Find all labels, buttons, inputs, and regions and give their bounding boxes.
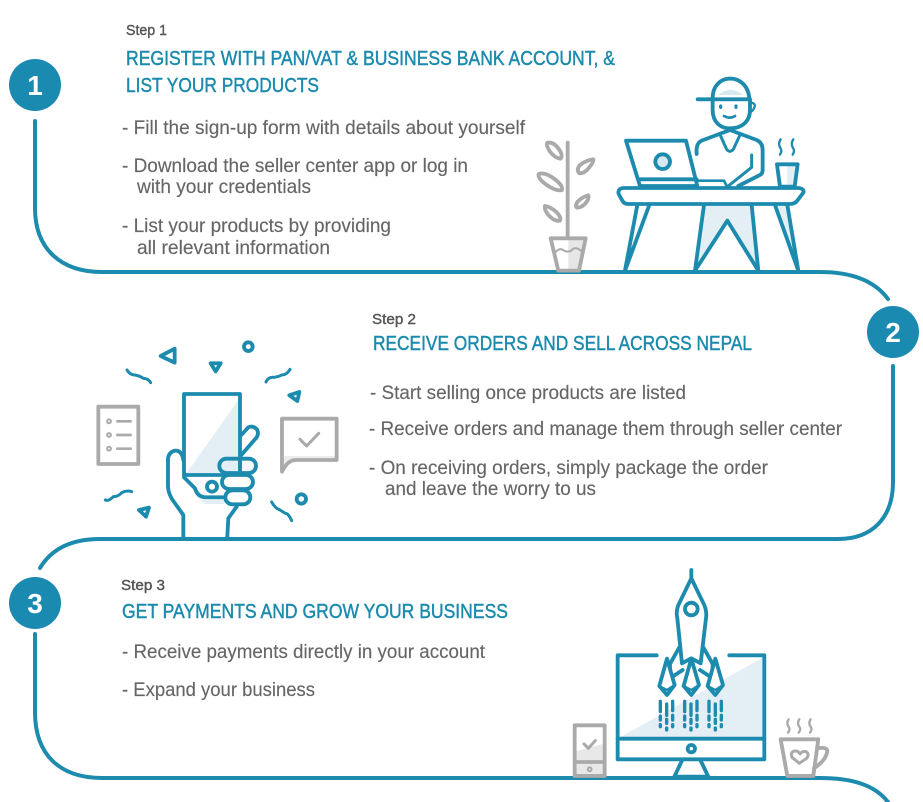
- coffee mug with heart: [781, 719, 827, 776]
- illustration: person at desk with laptop and plant: [538, 79, 804, 271]
- step 2 badge: [867, 306, 919, 358]
- step 1 bullet list: - Download the seller center app or log in: [122, 155, 468, 177]
- step 3 bullet list: [122, 641, 486, 701]
- step 3 bullet list: - Receive payments directly in your account: [122, 641, 486, 663]
- step 1 heading: LIST YOUR PRODUCTS: [126, 74, 319, 97]
- step 3 badge: [9, 577, 61, 629]
- step 3 heading: GET PAYMENTS AND GROW YOUR BUSINESS: [122, 600, 508, 623]
- chat check bubble icon: [282, 419, 337, 472]
- step 2 badge: 2: [885, 317, 901, 348]
- step 1 bullet list: all relevant information: [137, 237, 330, 259]
- rocket: [659, 570, 723, 695]
- step 3 badge: 3: [27, 588, 43, 619]
- step 3 bullet list: - Expand your business: [122, 679, 315, 701]
- step 2 bullet list: and leave the worry to us: [385, 478, 596, 500]
- illustration: hand holding phone with confetti: [98, 342, 337, 537]
- step 1 bullet list: - List your products by providing: [122, 215, 391, 237]
- step 1 bullet list: - Fill the sign-up form with details about yourself: [122, 117, 526, 139]
- confetti shapes: [105, 342, 306, 521]
- step 1 bullet list: [122, 117, 526, 259]
- step 1 badge: 1: [27, 70, 43, 101]
- laptop: [626, 141, 727, 186]
- rocket exhaust: [660, 701, 721, 730]
- step 2 label: Step 2: [372, 311, 416, 328]
- step 1 bullet list: with your credentials: [136, 176, 311, 198]
- gray phone device: [575, 725, 605, 776]
- plant: [538, 143, 593, 271]
- step 1 badge: [9, 59, 61, 111]
- step 1 heading: [126, 47, 615, 97]
- step 2 bullet list: [369, 382, 842, 500]
- step 1 heading: REGISTER WITH PAN/VAT & BUSINESS BANK ACCOUNT, &: [126, 47, 615, 70]
- desk legs: [625, 205, 798, 271]
- hand and phone: [168, 394, 258, 537]
- step 2 bullet list: - On receiving orders, simply package the order: [369, 457, 768, 479]
- person: [697, 79, 763, 186]
- coffee cup: [777, 139, 798, 187]
- step 2 heading: RECEIVE ORDERS AND SELL ACROSS NEPAL: [373, 332, 752, 355]
- step 2 bullet list: - Receive orders and manage them through seller center: [369, 418, 842, 440]
- step 1 label: Step 1: [126, 22, 167, 39]
- desk top: [618, 188, 804, 204]
- connecting timeline path: [35, 121, 893, 802]
- monitor: [618, 655, 764, 777]
- step 3 label: Step 3: [121, 577, 165, 594]
- step 2 bullet list: - Start selling once products are listed: [370, 382, 686, 404]
- illustration: rocket launching from monitor: [575, 570, 827, 777]
- document icon: [98, 407, 138, 464]
